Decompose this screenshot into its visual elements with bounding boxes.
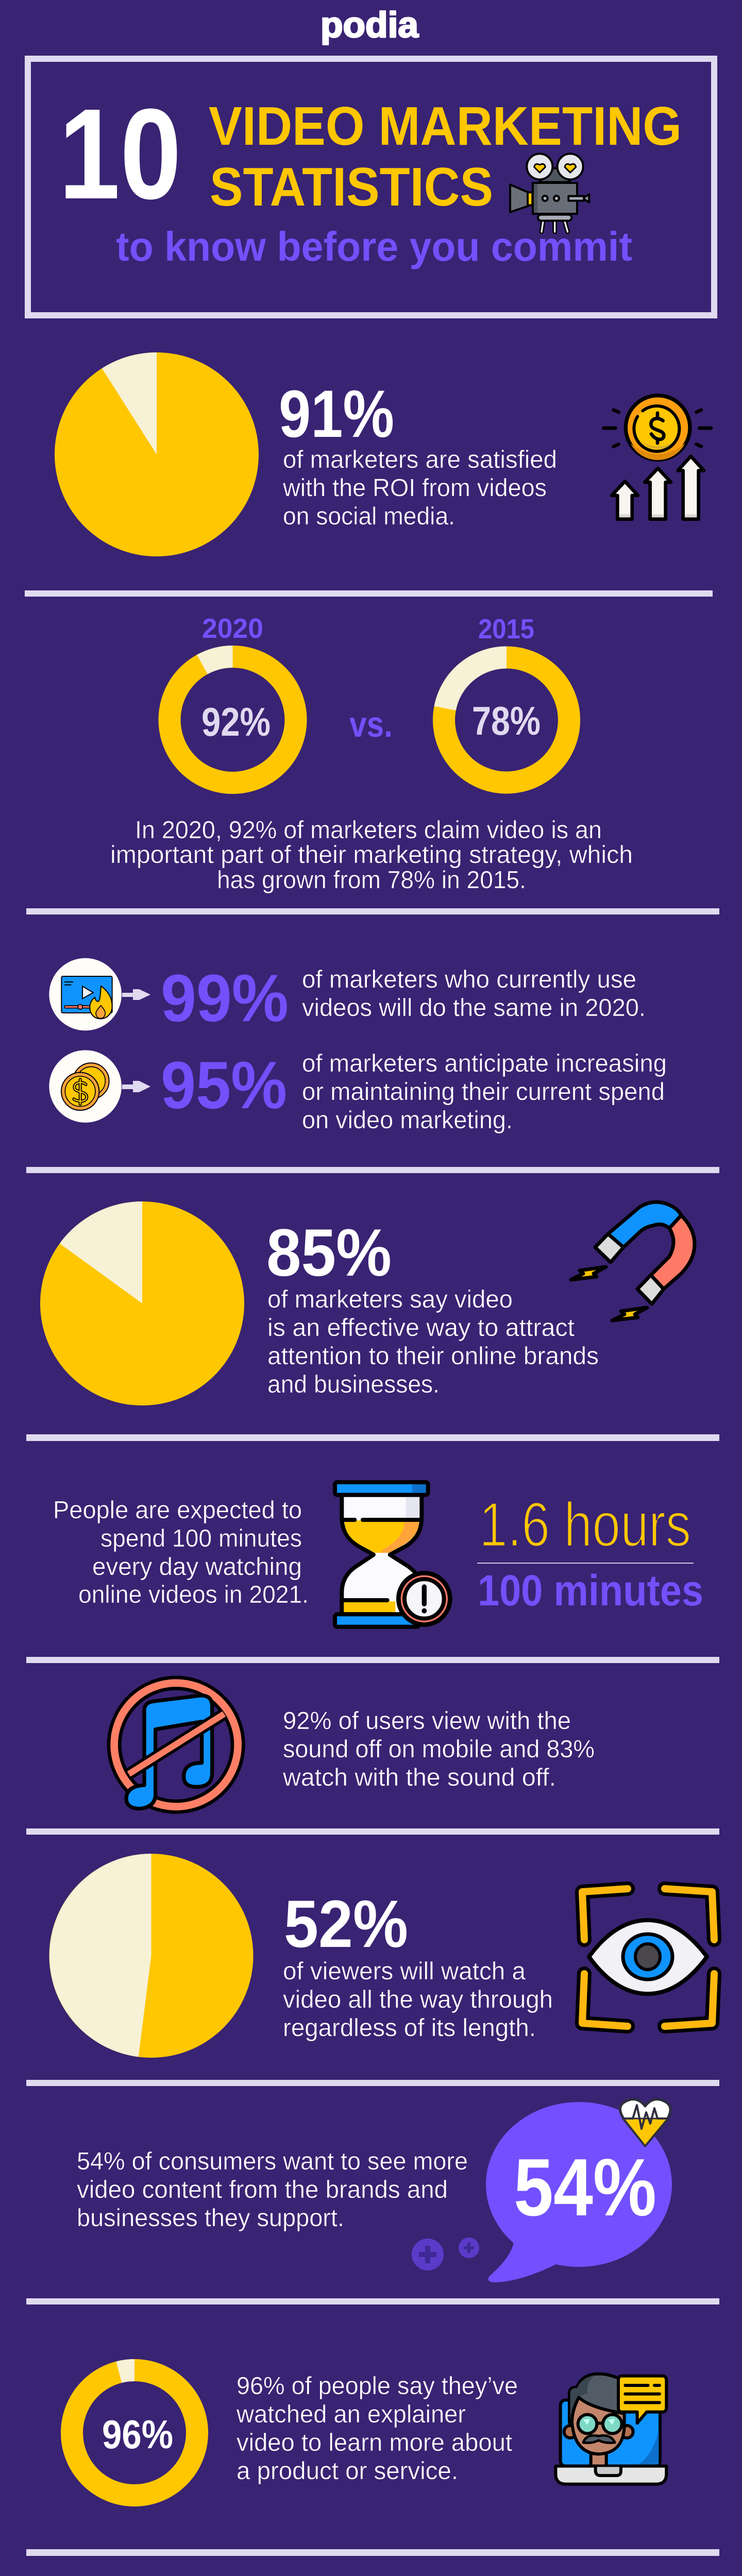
- big number: 54%: [514, 2142, 656, 2233]
- description: or maintaining their current spend: [302, 1078, 665, 1106]
- big number: 95%: [161, 1047, 287, 1123]
- description: sound off on mobile and 83%: [283, 1736, 595, 1763]
- pie chart: 85%: [40, 1201, 244, 1405]
- icon: eye with focus brackets: [582, 1889, 714, 2026]
- icon: presenter on laptop: [555, 2374, 666, 2484]
- description: [283, 1958, 553, 2042]
- description: of marketers are satisfied: [283, 446, 557, 473]
- panel: 99% stat: [49, 958, 646, 1036]
- description: regardless of its length.: [283, 2014, 536, 2042]
- description: on video marketing.: [302, 1107, 513, 1134]
- icon: crossed music note: [114, 1683, 238, 1809]
- description: People are expected to: [53, 1497, 302, 1524]
- description: [302, 1050, 667, 1134]
- arrow: [122, 989, 150, 1000]
- donut chart: 96%: [72, 2370, 197, 2496]
- description: important part of their marketing strategy, which: [110, 841, 633, 869]
- panel: 1.6 hours stat: [53, 1482, 703, 1627]
- logo: podia (top): podia: [321, 5, 419, 45]
- description: online videos in 2021.: [78, 1581, 309, 1608]
- description: video content from the brands and: [77, 2176, 448, 2204]
- description: [282, 1707, 595, 1791]
- description: In 2020, 92% of marketers claim video is an: [135, 817, 602, 844]
- subtitle: to know before you commit: [116, 224, 632, 269]
- panel: 95% stat: [49, 1047, 667, 1134]
- description: a product or service.: [237, 2458, 458, 2485]
- big number: 99%: [161, 960, 289, 1036]
- description: video all the way through: [283, 1986, 553, 2013]
- panel: sound off stat: [114, 1683, 595, 1809]
- donut chart: 92%: 92%: [201, 699, 271, 744]
- icon: film camera: [510, 154, 589, 232]
- description: [282, 446, 557, 530]
- decorative plus badges: [412, 2238, 479, 2270]
- panel: 54% stat: [77, 2099, 672, 2282]
- description: 54% of consumers want to see more: [77, 2148, 468, 2175]
- big figure: 1.6 hours: 1.6 hours: [479, 1489, 691, 1560]
- description: of marketers anticipate increasing: [302, 1050, 667, 1077]
- description: every day watching: [92, 1553, 302, 1581]
- description: videos will do the same in 2020.: [302, 994, 646, 1022]
- icon: heart with pulse: [620, 2099, 670, 2146]
- panel: 91% stat: [55, 352, 711, 556]
- icon: coins in circle: [49, 1050, 122, 1123]
- description: has grown from 78% in 2015.: [217, 867, 526, 894]
- big number: 52%: [284, 1886, 408, 1961]
- description: [110, 817, 633, 894]
- donut chart: 78%: [444, 657, 569, 783]
- description: watched an explainer: [236, 2401, 466, 2428]
- pie chart: 91%: [55, 352, 259, 556]
- description: businesses they support.: [77, 2205, 344, 2232]
- title line 2: STATISTICS: [210, 157, 493, 217]
- big number: 91%: [279, 376, 394, 451]
- icon: hourglass with alert: [335, 1482, 450, 1627]
- panel: 85% stat: [40, 1201, 695, 1405]
- vs label: vs.: [349, 704, 393, 744]
- icon: coin and rising arrows: [604, 396, 711, 519]
- donut chart: 78%: 78%: [472, 698, 541, 743]
- donut chart: 92%: [170, 656, 296, 783]
- description: spend 100 minutes: [100, 1525, 302, 1552]
- description: of marketers say video: [267, 1286, 513, 1313]
- panel: title frame: [28, 59, 714, 315]
- donut chart: 96%: 96%: [102, 2412, 173, 2457]
- description: of viewers will watch a: [283, 1958, 526, 1985]
- description: 92% of users view with the: [283, 1707, 571, 1735]
- big number: 85%: [266, 1215, 392, 1290]
- description: [77, 2148, 468, 2232]
- description: is an effective way to attract: [267, 1314, 575, 1342]
- description: [267, 1286, 599, 1398]
- year label 2020: 2020: [202, 613, 263, 644]
- description: and businesses.: [267, 1371, 440, 1398]
- panel: 52% stat: [49, 1854, 714, 2058]
- icon: video with flame in circle: [49, 958, 122, 1030]
- year label 2015: 2015: [478, 614, 534, 645]
- description: 96% of people say they’ve: [237, 2372, 518, 2400]
- description: [302, 966, 646, 1022]
- description: [236, 2372, 518, 2485]
- description: video to learn more about: [237, 2429, 512, 2456]
- icon: magnet: [571, 1202, 695, 1320]
- description: watch with the sound off.: [282, 1764, 556, 1791]
- speech bubble: [486, 2102, 672, 2282]
- title number: 10: [59, 82, 181, 226]
- description: on social media.: [283, 503, 455, 530]
- panel: 2020 vs 2015: [110, 613, 633, 894]
- description: of marketers who currently use: [302, 966, 636, 993]
- arrow: [122, 1081, 150, 1092]
- big figure: 100 minutes: 100 minutes: [478, 1566, 703, 1615]
- description: [53, 1497, 309, 1608]
- panel: 96% stat: [72, 2370, 666, 2496]
- description: attention to their online brands: [267, 1343, 599, 1370]
- pie chart: 52%: [49, 1854, 254, 2058]
- description: with the ROI from videos: [282, 474, 547, 502]
- title line 1: VIDEO MARKETING: [209, 96, 682, 157]
